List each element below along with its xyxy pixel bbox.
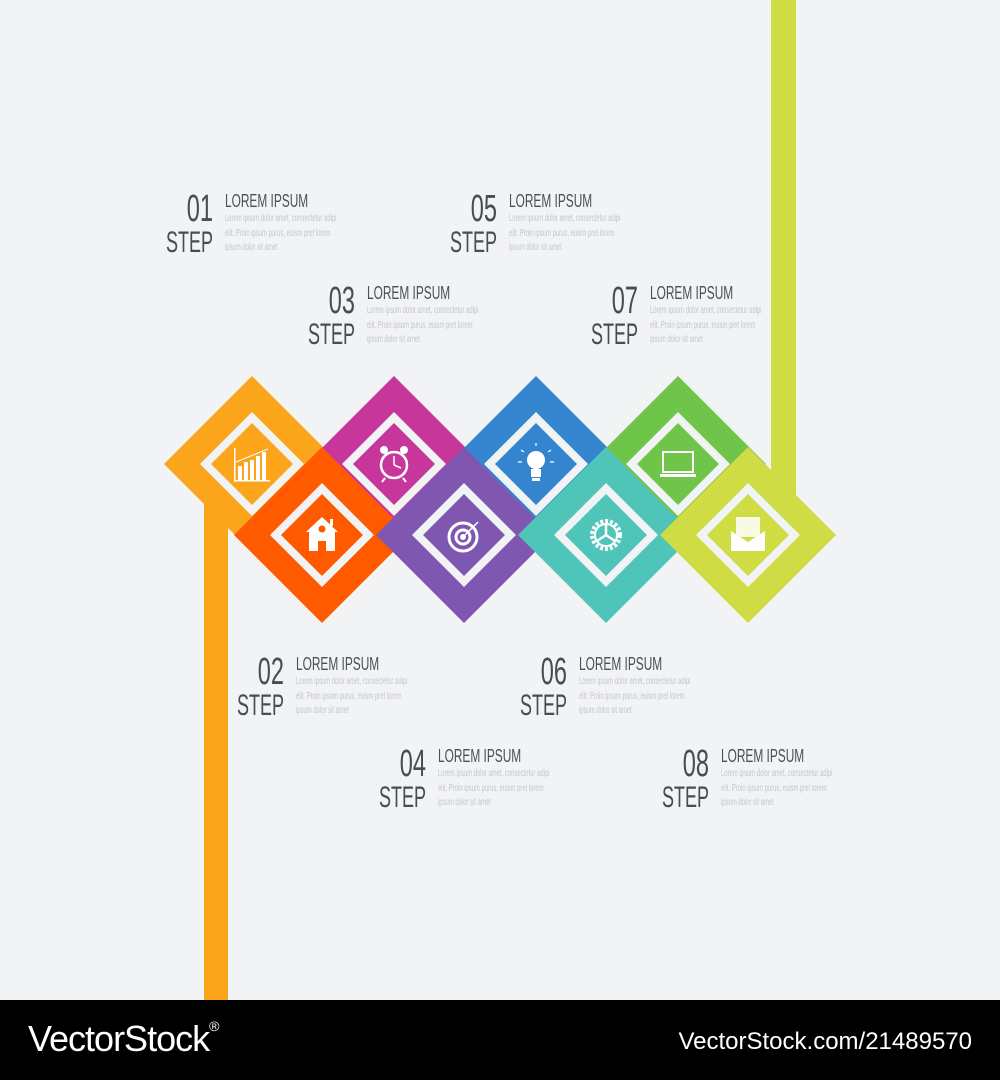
step 08: elit. Proin ipsum purus, euism pret lorem: [721, 782, 827, 794]
diamond 07 green: [590, 376, 766, 552]
diamond 06 teal: [518, 447, 694, 623]
step 08: ipsum dolor sit amet: [721, 797, 774, 808]
diamond 03 magenta: [306, 376, 482, 552]
step 01: elit. Proin ipsum purus, euism pret lorem: [225, 228, 331, 238]
step 01: STEP: [166, 226, 213, 259]
step 08: [662, 743, 833, 814]
step 04: 04: [400, 743, 426, 785]
step 03: elit. Proin ipsum purus, euism pret lorem: [367, 320, 473, 330]
step 08: Lorem ipsum dolor amet, consectetur adipi: [721, 768, 833, 779]
step 06: Lorem ipsum dolor amet, consectetur adipi: [579, 676, 691, 687]
icon: light bulb: [518, 443, 554, 481]
step 07: STEP: [591, 318, 638, 351]
step 03: ipsum dolor sit amet: [367, 334, 420, 345]
vertical line: lime stem: [771, 0, 796, 500]
step 07: elit. Proin ipsum purus, euism pret lorem: [650, 320, 756, 330]
footer logo text: VectorStock®: [28, 1018, 218, 1059]
step 03: 03: [329, 280, 355, 322]
step 03: LOREM IPSUM: [367, 283, 450, 303]
step 01: 01: [187, 188, 213, 230]
step 04: elit. Proin ipsum purus, euism pret lorem: [438, 782, 544, 794]
step 06: ipsum dolor sit amet: [579, 705, 632, 716]
step 07: LOREM IPSUM: [650, 283, 733, 303]
icon: target: [449, 522, 478, 551]
diamond 01 yellow: [164, 376, 340, 552]
footer bar: [0, 1000, 1000, 1080]
step 07: [591, 280, 762, 351]
step 03: [308, 280, 479, 351]
step 08: STEP: [662, 781, 709, 814]
diamond 04 purple: [376, 447, 552, 623]
step 01: LOREM IPSUM: [225, 191, 308, 211]
step 07: Lorem ipsum dolor amet, consectetur adipi: [650, 305, 762, 316]
icon: gear: [592, 521, 620, 549]
step 06: STEP: [520, 689, 567, 722]
step 04: ipsum dolor sit amet: [438, 797, 491, 808]
step 08: LOREM IPSUM: [721, 746, 804, 766]
vertical line: yellow stem: [204, 500, 228, 1000]
step 02: STEP: [237, 689, 284, 722]
step 06: elit. Proin ipsum purus, euism pret lorem: [579, 690, 685, 702]
diamond 08 lime: [660, 447, 836, 623]
step 01: Lorem ipsum dolor amet, consectetur adipi: [225, 213, 337, 224]
icon: laptop: [660, 452, 696, 477]
step 02: LOREM IPSUM: [296, 654, 379, 674]
step 05: LOREM IPSUM: [509, 191, 592, 211]
step 02: 02: [258, 651, 284, 693]
step 05: [450, 188, 621, 259]
step 05: ipsum dolor sit amet: [509, 242, 562, 253]
step 02: [237, 651, 408, 722]
step 08: 08: [683, 743, 709, 785]
step 02: Lorem ipsum dolor amet, consectetur adipi: [296, 676, 408, 687]
icon: bar chart: [234, 448, 270, 482]
step 02: ipsum dolor sit amet: [296, 705, 349, 716]
step 05: Lorem ipsum dolor amet, consectetur adipi: [509, 213, 621, 224]
footer url text: VectorStock.com/21489570: [678, 1028, 972, 1055]
icon: house: [306, 517, 338, 551]
step 07: 07: [612, 280, 638, 322]
step 04: Lorem ipsum dolor amet, consectetur adipi: [438, 768, 550, 779]
diamond 02 orange: [234, 447, 410, 623]
step 05: STEP: [450, 226, 497, 259]
step 04: STEP: [379, 781, 426, 814]
step 06: LOREM IPSUM: [579, 654, 662, 674]
step 05: 05: [471, 188, 497, 230]
step 04: [379, 743, 550, 814]
diamond 05 blue: [448, 376, 624, 552]
step 03: Lorem ipsum dolor amet, consectetur adipi: [367, 305, 479, 316]
step 05: elit. Proin ipsum purus, euism pret lorem: [509, 228, 615, 238]
icon: alarm clock: [380, 446, 408, 482]
step 07: ipsum dolor sit amet: [650, 334, 703, 345]
step 01: [166, 188, 337, 259]
step 06: 06: [541, 651, 567, 693]
step 02: elit. Proin ipsum purus, euism pret lorem: [296, 690, 402, 702]
step 03: STEP: [308, 318, 355, 351]
step 01: ipsum dolor sit amet: [225, 242, 278, 253]
step 04: LOREM IPSUM: [438, 746, 521, 766]
step 06: [520, 651, 691, 722]
icon: envelope: [731, 517, 765, 551]
